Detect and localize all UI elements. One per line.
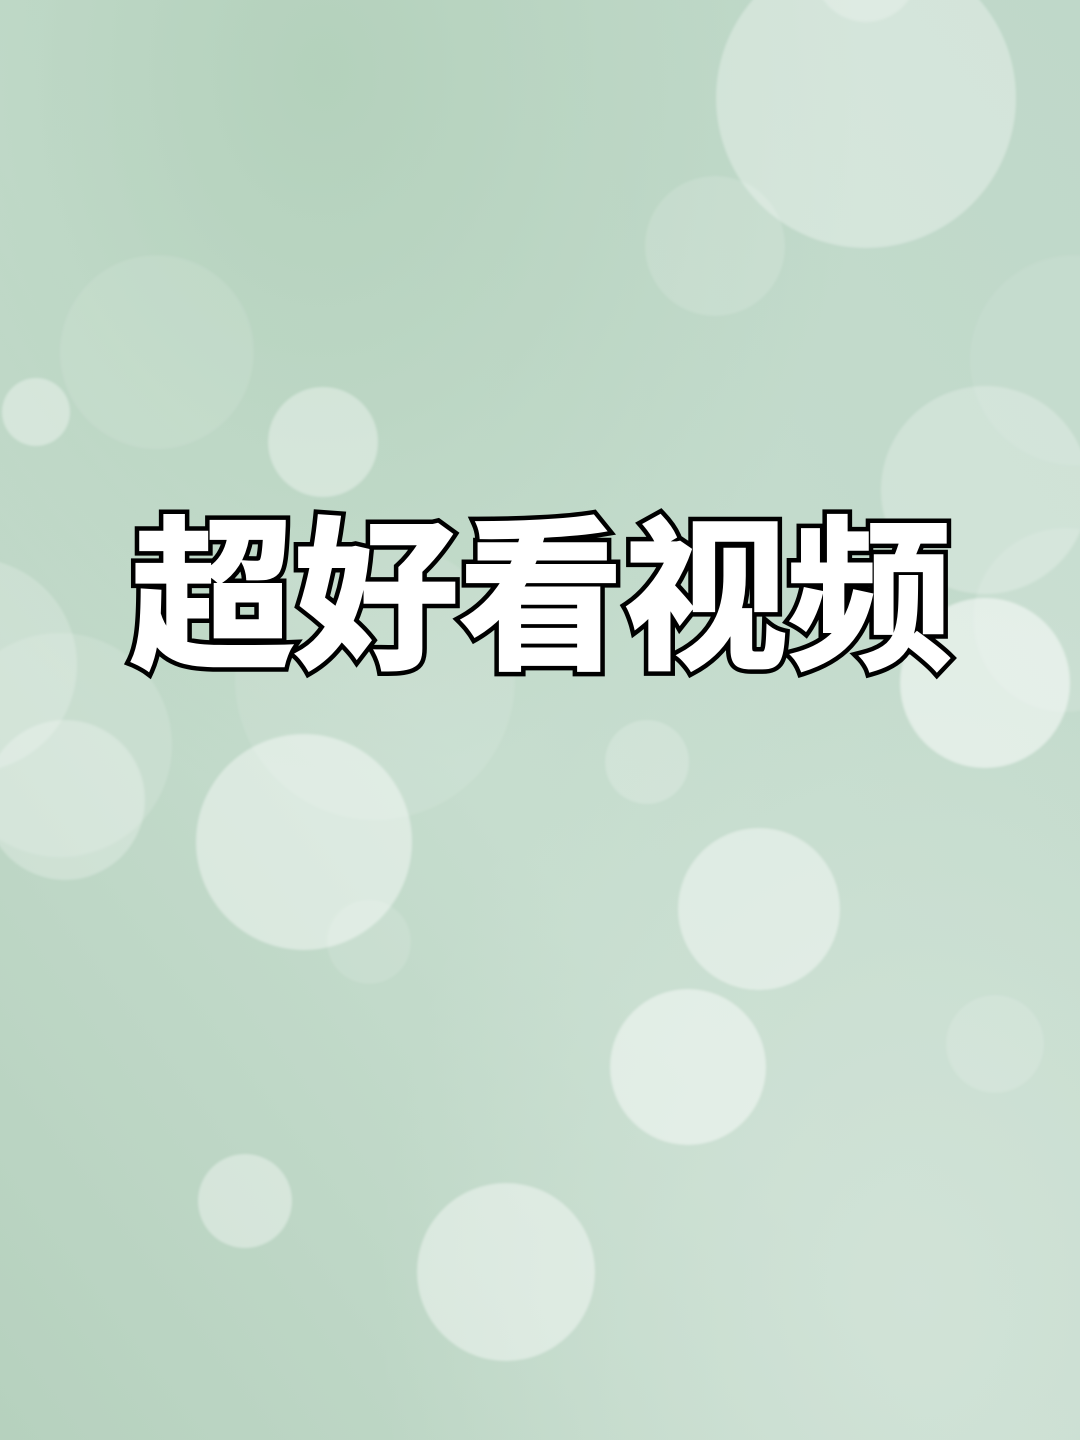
title: 超好看视频: 超好看视频 [130, 507, 952, 690]
title: 超好看视频: 超好看视频 [130, 507, 952, 690]
